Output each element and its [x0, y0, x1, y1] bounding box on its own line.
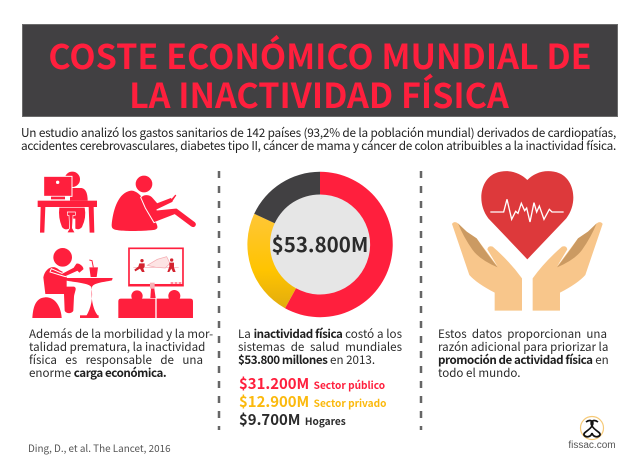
- donut segment: private sector: [247, 214, 296, 308]
- left column text: [29, 326, 213, 381]
- divider: left dashed line: [218, 171, 220, 430]
- icon: two people watching television: [118, 248, 193, 318]
- icon: person at desk with computer: [38, 172, 97, 233]
- right column text: promoción de actividad física en: [438, 352, 609, 368]
- donut segment: public sector: [285, 172, 393, 317]
- breakdown: households: $9.700M Hogares: [239, 409, 346, 430]
- left column text: física es responsable de una: [29, 352, 203, 368]
- left column text: Además de la morbilidad y la mor-: [29, 326, 213, 342]
- heartbeat line: [490, 199, 564, 222]
- donut chart: total cost by sector: [247, 172, 393, 317]
- logo mark: fissac: [580, 416, 604, 440]
- left column text: talidad prematura, la inactividad: [29, 339, 205, 355]
- intro text: accidentes cerebrovasculares, diabetes tipo II, cáncer de mama y cáncer de colon atribuibles a la inactividad física.: [21, 137, 616, 154]
- centre column text: $53.800 millones en 2013.: [238, 352, 375, 368]
- divider: right dashed line: [420, 171, 422, 430]
- heart: [481, 171, 573, 259]
- title banner: LA INACTIVIDAD FÍSICA: [129, 68, 509, 118]
- title banner: [22, 24, 618, 117]
- left column text: enorme carga económica.: [29, 365, 166, 381]
- icon: person eating at table: [32, 248, 113, 318]
- right column text: razón adicional para priorizar la: [438, 339, 608, 355]
- right column text: Estos datos proporcionan una: [438, 326, 607, 342]
- breakdown: private sector: $12.900M Sector privado: [239, 391, 386, 412]
- breakdown: public sector: $31.200M Sector público: [239, 373, 385, 394]
- right column text: [438, 326, 609, 381]
- intro text: Un estudio analizó los gastos sanitarios de 142 países (93,2% de la población mundial) derivados de cardiopatías,: [21, 124, 616, 141]
- icon: person on beanbag with phone: [112, 176, 196, 231]
- left hand: [452, 222, 522, 311]
- centre column text: [238, 326, 402, 368]
- centre column text: La inactividad física costó a los: [238, 326, 402, 342]
- intro text: [21, 124, 616, 154]
- citation: Ding, D., et al. The Lancet, 2016: [28, 441, 171, 455]
- title banner: COSTE ECONÓMICO MUNDIAL DE: [48, 29, 592, 79]
- centre column text: sistemas de salud mundiales: [238, 339, 402, 355]
- donut segment: households: [254, 172, 320, 223]
- icon: heart with heartbeat held by hands: [452, 171, 603, 311]
- right column text: todo el mundo.: [438, 365, 521, 381]
- right hand: [533, 222, 603, 311]
- logo text: fissac.com: [568, 440, 616, 451]
- donut centre value: $53.800M: [272, 228, 368, 258]
